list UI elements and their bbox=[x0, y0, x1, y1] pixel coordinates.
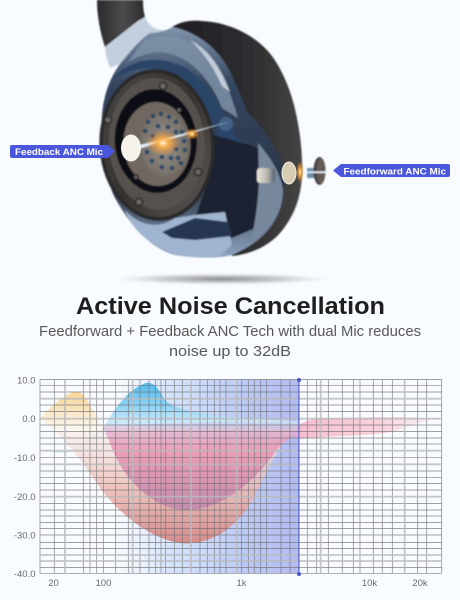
blue highlighted frequency band bbox=[115, 380, 299, 574]
shell dark blue band bbox=[112, 60, 248, 150]
x axis labels: 1k bbox=[236, 578, 247, 589]
grid bbox=[40, 380, 442, 573]
deep salmon curve area bbox=[55, 428, 298, 544]
light beam bbox=[132, 121, 232, 151]
label: Feedback ANC Mic: Feedback ANC Mic bbox=[15, 147, 103, 157]
pink curve area bbox=[103, 420, 298, 510]
ring screws bbox=[104, 82, 202, 206]
label: Feedforward ANC Mic bbox=[333, 164, 450, 177]
driver ring bbox=[94, 65, 220, 225]
x axis labels: 100 bbox=[96, 578, 111, 589]
y axis labels: -10.0 bbox=[14, 453, 36, 464]
label: Feedback ANC Mic bbox=[10, 145, 115, 158]
subtitle: Feedforward + Feedback ANC Tech with dual Mic reduces bbox=[39, 323, 421, 340]
label: Feedforward ANC Mic: Feedforward ANC Mic bbox=[344, 166, 446, 176]
subtitle bbox=[39, 323, 421, 360]
y axis labels: 0.0 bbox=[22, 414, 36, 425]
speaker grille holes bbox=[143, 112, 187, 170]
right pink tail bbox=[298, 417, 440, 439]
2.7k marker line bbox=[297, 378, 301, 576]
feedforward mic part bbox=[306, 157, 328, 185]
x axis labels: 20 bbox=[48, 578, 59, 589]
shell upper highlight bbox=[128, 36, 238, 118]
orange rim flare bbox=[296, 161, 304, 183]
ear cushion bbox=[172, 21, 302, 256]
y axis labels: -20.0 bbox=[14, 492, 36, 503]
floor shadow bbox=[112, 273, 332, 285]
x axis labels: 10k bbox=[362, 578, 377, 589]
y axis labels: -40.0 bbox=[14, 569, 36, 580]
y axis labels bbox=[14, 376, 36, 580]
transparent shell bbox=[102, 27, 285, 258]
orange flare bbox=[146, 130, 180, 156]
title: Active Noise Cancellation bbox=[76, 293, 385, 320]
y axis labels: 10.0 bbox=[17, 376, 36, 386]
shell interior bbox=[190, 135, 262, 238]
faint blue curve bbox=[50, 428, 103, 452]
y axis labels: -30.0 bbox=[14, 530, 36, 542]
headphone earcup bbox=[94, 0, 302, 258]
yellow curve area bbox=[40, 392, 103, 442]
x axis labels: 20k bbox=[412, 578, 428, 589]
headband bbox=[97, 0, 145, 47]
blue curve area bbox=[103, 383, 298, 436]
translucent slider bbox=[105, 17, 172, 68]
shell right tube bbox=[250, 143, 283, 243]
side silver pin bbox=[257, 168, 275, 183]
feedback mic bbox=[121, 134, 141, 162]
subtitle: noise up to 32dB bbox=[169, 343, 291, 360]
shell lower clear edge bbox=[125, 210, 232, 258]
x axis labels bbox=[48, 578, 428, 589]
noise reduction chart bbox=[14, 376, 442, 589]
feedforward mic plate bbox=[282, 162, 296, 184]
